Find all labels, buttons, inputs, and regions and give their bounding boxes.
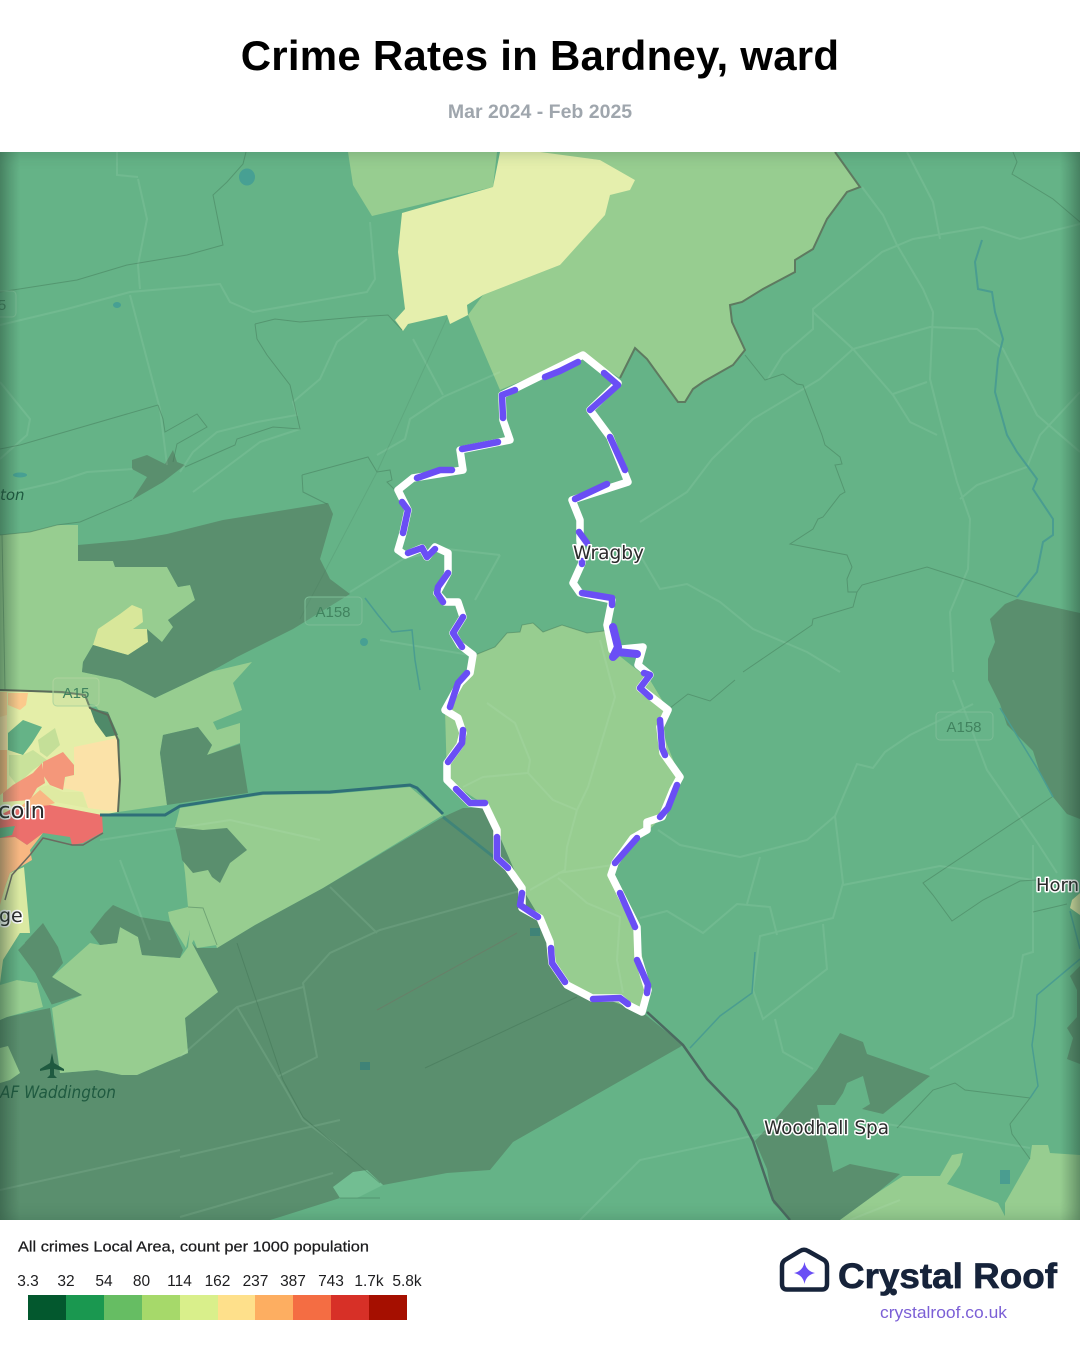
subtitle: date range: Mar 2024 - Feb 2025	[448, 101, 632, 123]
legend tick labels: 54	[95, 1273, 113, 1290]
region: Lincoln light patch	[9, 750, 47, 785]
region: Lincoln orange top	[8, 693, 28, 710]
region: far southeast light	[1005, 1145, 1080, 1220]
region: Lincoln teal spot	[0, 826, 15, 838]
ward boundary: white outline	[398, 355, 680, 1012]
legend tick labels: 32	[57, 1273, 75, 1290]
road shields	[0, 291, 993, 740]
region: lower light far left	[0, 1046, 20, 1083]
region: Lincoln south orange	[0, 833, 43, 905]
region: west dark	[78, 503, 350, 698]
legend tick labels: 114	[167, 1273, 192, 1290]
legend tick labels: 743	[318, 1273, 344, 1290]
label: cropped place name: ton	[0, 486, 25, 504]
label: Horncastle (cropped): Horn	[1036, 875, 1079, 896]
region: small pale patch	[93, 605, 148, 655]
logo wordmark: Crystal Roof	[838, 1257, 1057, 1296]
region: west light	[0, 525, 252, 812]
legend tick labels: 387	[280, 1273, 306, 1290]
region: teal strip	[3, 933, 53, 1007]
region: bardney ward south light	[445, 623, 680, 1012]
shield: A15: A15	[63, 685, 89, 702]
region: far east dark	[1067, 966, 1080, 1064]
region: Lincoln orange west lower	[0, 750, 7, 795]
icon: airplane	[40, 1053, 64, 1078]
choropleth regions	[0, 152, 1080, 1220]
region: Lincoln pale lower	[38, 785, 88, 808]
shield: cropped road number	[0, 291, 16, 317]
region: northwest small dark	[132, 450, 185, 500]
region: north pale yellow	[395, 152, 635, 331]
ward boundary: purple dashes	[402, 362, 677, 1004]
label: Woodhall Spa: Woodhall Spa	[764, 1117, 889, 1139]
region: southwest light	[52, 927, 218, 1075]
legend colour scale	[28, 1295, 407, 1320]
region: Lincoln orange west	[0, 692, 7, 717]
roads	[0, 152, 1080, 1220]
icon: house logo	[782, 1250, 827, 1290]
region: Lincoln south pale	[0, 867, 30, 983]
region: Lincoln dark corner	[90, 708, 118, 737]
region: lower light bottom-left	[0, 980, 43, 1020]
legend tick labels: 237	[243, 1273, 268, 1290]
shield: A158 east	[936, 712, 993, 740]
region: south dark	[0, 808, 683, 1220]
region: central south light	[175, 787, 443, 948]
rivers and water features	[13, 168, 1080, 1220]
region: Lincoln pale	[0, 690, 120, 822]
map base layer	[0, 152, 1080, 1220]
region: northeast light	[468, 152, 860, 402]
legend tick labels: 3.3	[17, 1273, 39, 1290]
region: north light	[348, 152, 497, 216]
shield: A15	[53, 678, 99, 706]
shield: A158 west	[305, 597, 362, 625]
panel: legend	[17, 1238, 422, 1320]
region: mid dark near Lincoln	[160, 727, 248, 805]
map place labels	[0, 542, 1079, 1139]
region: east dark	[988, 599, 1080, 819]
region: dark southwest	[18, 923, 82, 1005]
legend tick labels: 1.7k	[354, 1273, 384, 1290]
legend tick labels: 5.8k	[392, 1273, 422, 1290]
shield: A158 west: A158	[315, 604, 351, 621]
shield: A158 east: A158	[946, 719, 982, 736]
region: small light block	[168, 907, 217, 948]
region: Lincoln coral east	[43, 752, 74, 790]
map edge vignette	[0, 152, 1080, 1220]
legend title: All crimes Local Area, count per 1000 population	[18, 1238, 369, 1256]
website url: crystalroof.co.uk	[880, 1304, 1008, 1322]
thick region outlines	[0, 152, 860, 900]
label: Wragby: Wragby	[573, 542, 644, 564]
legend tick labels	[17, 1273, 422, 1290]
panel: choropleth map	[0, 152, 1080, 1220]
legend tick labels: 162	[205, 1273, 230, 1290]
region: small patch south	[333, 1170, 383, 1198]
legend tick labels: 80	[133, 1273, 150, 1290]
region: Lincoln cream	[63, 738, 120, 812]
region: Lincoln red	[0, 805, 103, 845]
label: RAF Waddington: AF Waddington	[0, 1083, 116, 1103]
region: Lincoln cream west	[0, 715, 7, 750]
district boundaries	[0, 152, 1080, 1198]
italic map labels	[0, 486, 116, 1103]
panel: brand footer	[780, 1248, 1058, 1322]
region: Lincoln teal patch	[8, 720, 42, 755]
region: Lincoln orange small	[20, 790, 55, 807]
region: southeast light	[840, 1153, 1007, 1220]
region: Horncastle pale	[1070, 893, 1080, 915]
region: Lincoln coral west	[3, 763, 45, 802]
title: Crime Rates in Bardney, ward	[241, 32, 839, 79]
region: dark strip	[90, 905, 183, 958]
region: Lincoln small light	[38, 728, 60, 757]
region: southeast dark	[755, 1033, 930, 1220]
region: dark blob south of river	[175, 827, 247, 883]
